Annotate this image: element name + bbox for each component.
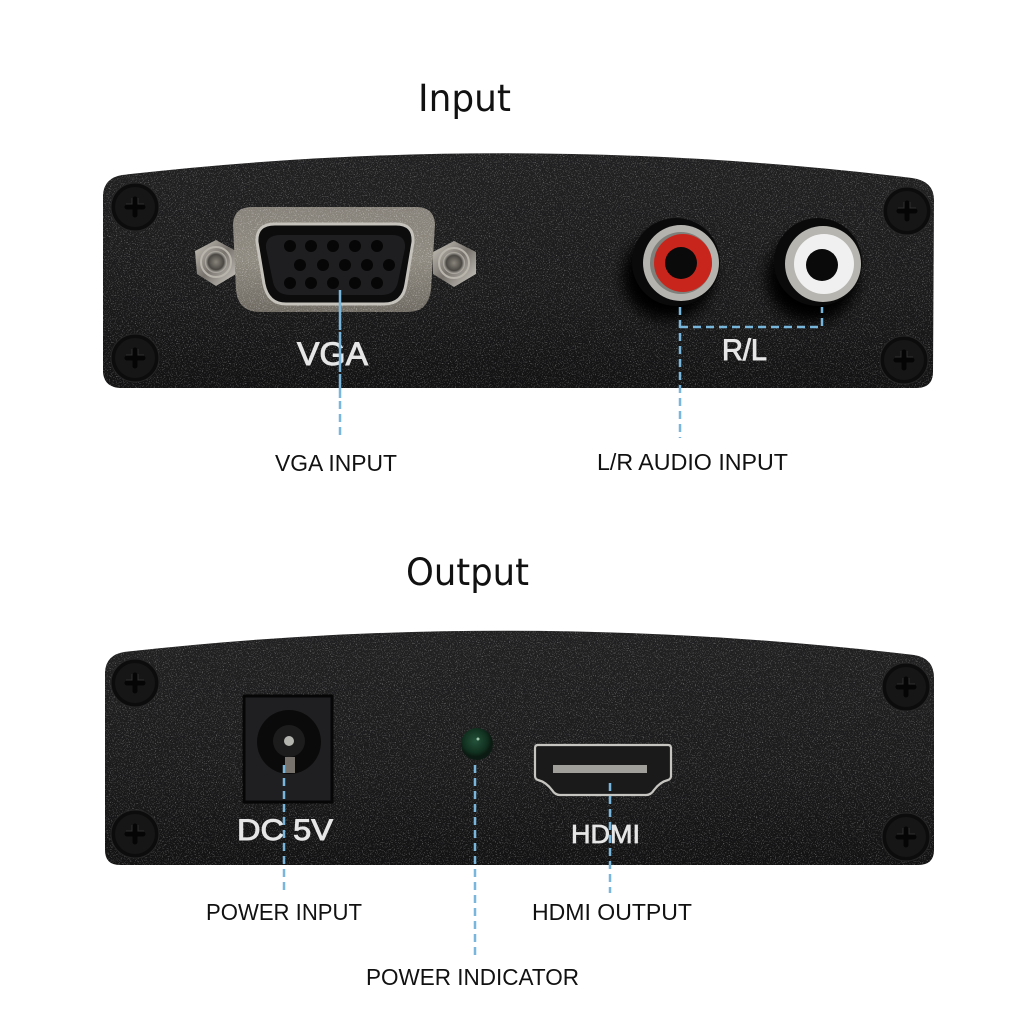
- arrow: HDMI leader line: [609, 783, 611, 893]
- arrow: power indicator leader line: [474, 765, 476, 958]
- arrow: power input leader line: [283, 765, 285, 893]
- label: R/L: R/L: [722, 334, 767, 367]
- icon: input corner screws: [111, 183, 931, 384]
- icon: DC power jack: [244, 696, 332, 802]
- label: DC 5V: DC 5V: [237, 814, 333, 847]
- panel: input device face: [100, 148, 938, 392]
- icon: red RCA jack: [622, 218, 720, 320]
- icon: power LED: [461, 728, 493, 760]
- icon: VGA connector: [195, 205, 476, 315]
- label: VGA INPUT: VGA INPUT: [275, 450, 397, 476]
- label: L/R AUDIO INPUT: L/R AUDIO INPUT: [597, 449, 788, 475]
- arrow: VGA leader line: [339, 290, 341, 438]
- icon: output corner screws: [111, 659, 930, 861]
- label: HDMI OUTPUT: HDMI OUTPUT: [532, 899, 692, 925]
- label: POWER INPUT: POWER INPUT: [206, 899, 362, 925]
- label: VGA: VGA: [297, 336, 369, 372]
- label: HDMI: HDMI: [571, 819, 640, 849]
- label: POWER INDICATOR: POWER INDICATOR: [366, 964, 579, 990]
- arrow: audio leader line: [680, 307, 822, 438]
- icon: white RCA jack: [766, 218, 862, 322]
- icon: HDMI port: [535, 745, 671, 795]
- panel: output device face: [100, 625, 938, 869]
- title: Output: Output: [406, 551, 529, 594]
- title: Input: Input: [418, 77, 511, 120]
